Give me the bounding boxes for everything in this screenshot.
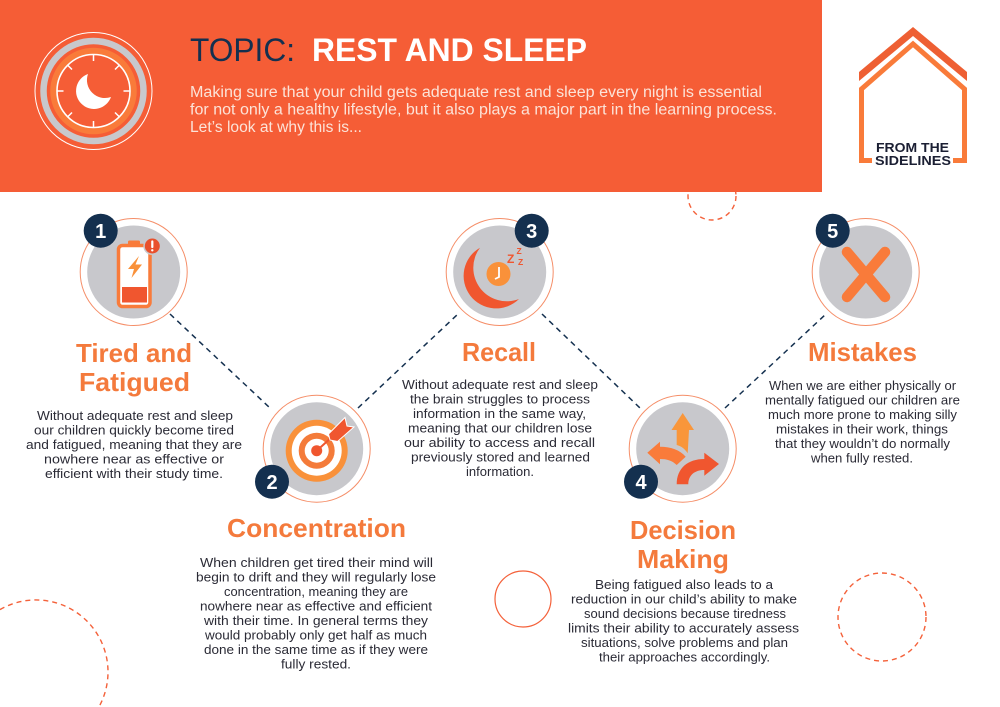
text: Being fatigued also leads to a xyxy=(595,577,774,592)
text: efficient with their study time. xyxy=(45,466,223,481)
text xyxy=(26,408,242,481)
heading: Decision xyxy=(630,515,736,545)
text xyxy=(402,377,598,479)
icon: moon, clock and zzz: Z xyxy=(518,257,523,267)
text: and fatigued, meaning that they are xyxy=(26,437,242,452)
text: information in the same way, xyxy=(413,406,586,421)
text xyxy=(568,577,800,664)
icon: clock with moon xyxy=(35,32,152,150)
badge 4: 4 xyxy=(635,472,647,494)
heading: Recall xyxy=(462,337,536,367)
step 2: concentration xyxy=(196,395,436,672)
text: nowhere near as effective or xyxy=(44,452,225,466)
step 1: tired and fatigued xyxy=(26,214,242,481)
text: When children get tired their mind will xyxy=(200,555,433,570)
title: TOPIC: xyxy=(190,32,295,68)
connector: 1 to 2 xyxy=(170,314,270,408)
text: our children quickly become tired xyxy=(34,422,234,438)
decorative solid circle xyxy=(495,571,551,627)
text: much more prone to making silly xyxy=(768,407,957,422)
heading: Tired and xyxy=(76,338,192,368)
connector: 4 to 5 xyxy=(725,314,826,408)
step 3: recall xyxy=(402,214,598,479)
text: When we are either physically or xyxy=(769,378,957,393)
text: their approaches accordingly. xyxy=(599,650,770,664)
step 4: decision making xyxy=(568,395,800,664)
icon: cross xyxy=(847,252,885,297)
text: that they wouldn’t do normally xyxy=(775,436,951,451)
heading xyxy=(630,515,736,574)
banner xyxy=(0,0,822,192)
intro text: Making sure that your child gets adequate rest and sleep every night is essential xyxy=(190,84,762,101)
badge 1: 1 xyxy=(95,221,106,243)
intro text: for not only a healthy lifestyle, but it also plays a major part in the learning process. xyxy=(190,102,777,118)
text: done in the same time as if they were xyxy=(204,642,428,657)
badge 2: 2 xyxy=(266,472,278,494)
text: limits their ability to accurately assess xyxy=(568,620,800,636)
badge 3 xyxy=(515,214,549,248)
text: Without adequate rest and sleep xyxy=(402,377,598,392)
icon: moon, clock and zzz xyxy=(464,246,523,308)
badge 1 xyxy=(84,214,118,248)
heading xyxy=(76,338,192,397)
decorative dashed circle: bottom left xyxy=(0,600,108,707)
icon: moon, clock and zzz: Z xyxy=(507,252,514,266)
badge 5 xyxy=(816,214,850,248)
text: mistakes in their work, things xyxy=(776,422,949,436)
title xyxy=(190,32,587,68)
step 5: mistakes xyxy=(765,214,960,466)
text: with their time. In general terms they xyxy=(203,613,429,628)
connector: 2 to 3 xyxy=(358,314,458,408)
title: REST AND SLEEP xyxy=(312,32,587,68)
text: would probably only get half as much xyxy=(204,628,427,642)
text: our ability to access and recall xyxy=(404,435,595,450)
text: Without adequate rest and sleep xyxy=(37,408,233,423)
text: nowhere near as effective and efficient xyxy=(200,598,432,614)
icon: moon, clock and zzz: Z xyxy=(516,246,522,256)
text xyxy=(765,378,960,466)
decorative dashed circle: bottom right xyxy=(838,573,926,661)
badge 3: 3 xyxy=(526,221,537,243)
text: concentration, meaning they are xyxy=(224,584,408,599)
badge 2 xyxy=(255,465,289,499)
intro text: Let’s look at why this is... xyxy=(190,119,362,136)
intro text xyxy=(190,84,777,136)
icon: target xyxy=(286,418,354,482)
text: mentally fatigued our children are xyxy=(765,392,960,408)
text: fully rested. xyxy=(281,656,351,672)
icon: three arrows xyxy=(647,413,719,484)
text: information. xyxy=(466,464,534,479)
text: begin to drift and they will regularly lose xyxy=(196,570,436,584)
icon: low battery xyxy=(118,237,161,306)
heading: Fatigued xyxy=(79,367,190,397)
heading: Concentration xyxy=(227,513,406,543)
text: reduction in our child’s ability to make xyxy=(571,592,797,606)
text: meaning that our children lose xyxy=(408,420,592,436)
text: the brain struggles to process xyxy=(410,392,591,406)
logo: From the Sidelines xyxy=(859,27,967,168)
text: when fully rested. xyxy=(810,450,913,466)
logo: From the Sidelines: FROM THE xyxy=(876,140,949,155)
text: previously stored and learned xyxy=(411,450,590,464)
heading: Making xyxy=(637,544,729,574)
text: situations, solve problems and plan xyxy=(581,635,788,650)
decorative dashed circle: under banner xyxy=(688,172,736,220)
text: sound decisions because tiredness xyxy=(584,606,786,621)
connector: 3 to 4 xyxy=(542,314,640,408)
text xyxy=(196,555,436,672)
badge 4 xyxy=(624,465,658,499)
badge 5: 5 xyxy=(827,221,838,243)
logo: From the Sidelines: SIDELINES xyxy=(875,153,951,168)
heading: Mistakes xyxy=(808,337,917,367)
